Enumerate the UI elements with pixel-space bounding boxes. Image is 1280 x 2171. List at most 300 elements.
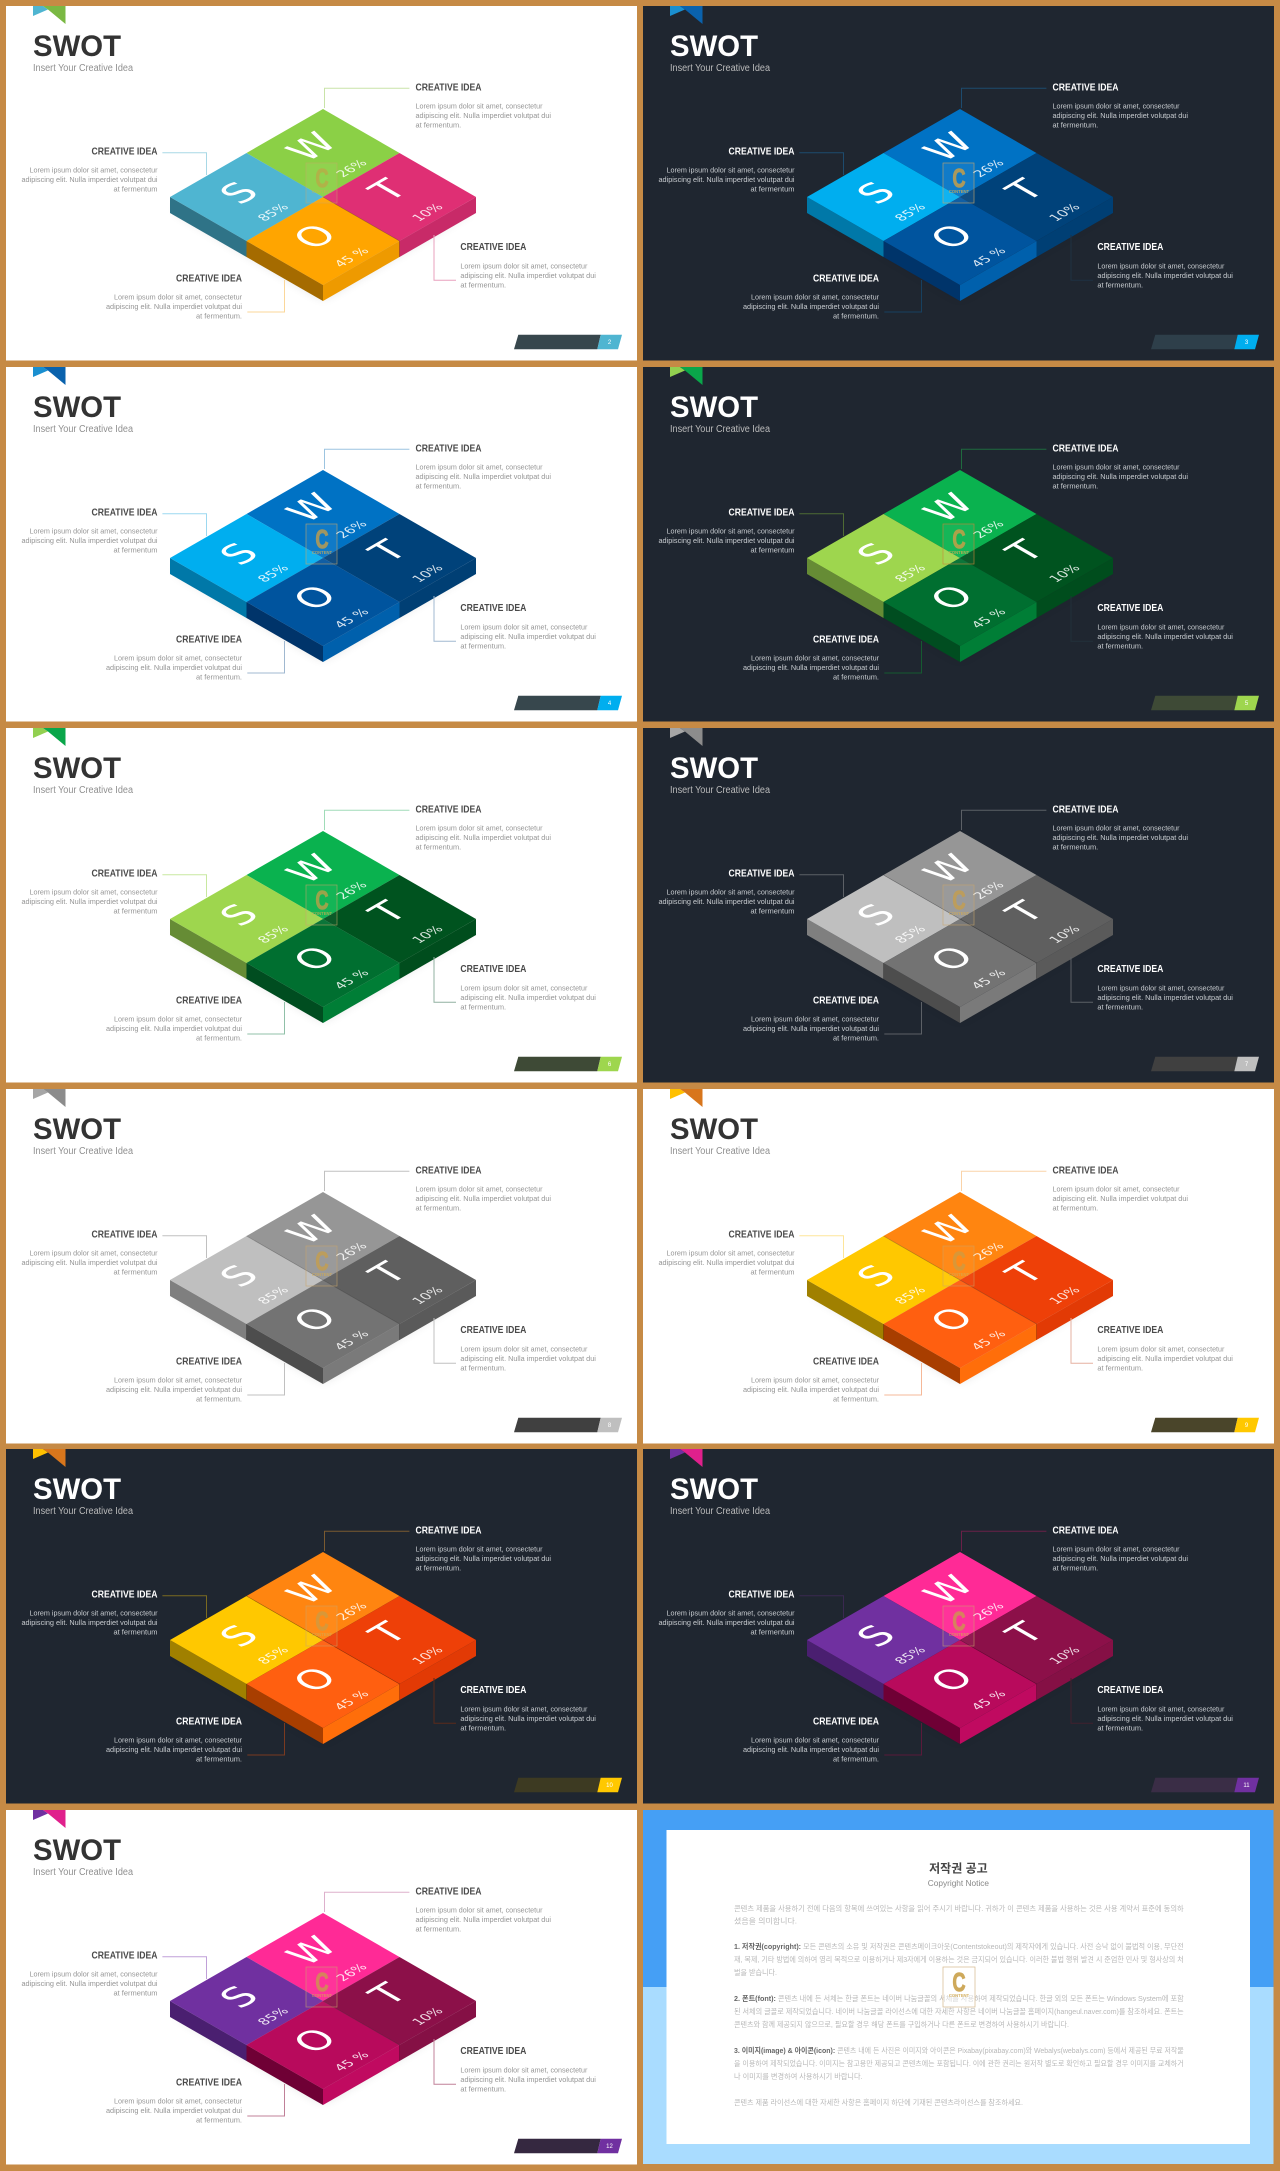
panel: slide 7 dark gray xyxy=(643,728,1274,1082)
callout: W xyxy=(324,804,551,852)
callout: T: Lorem ipsum dolor sit amet, consectetur xyxy=(460,1344,588,1353)
callout: T: at fermentum. xyxy=(1097,1002,1143,1011)
callout: T: CREATIVE IDEA xyxy=(1097,602,1164,614)
isometric SWOT diagram: T xyxy=(358,895,418,929)
callout: S: at fermentum xyxy=(750,1628,794,1637)
page number tab xyxy=(1151,1057,1259,1071)
title: SWOT xyxy=(33,1473,121,1506)
callout: S: CREATIVE IDEA xyxy=(92,1589,158,1601)
callout: O: adipiscing elit. Nulla imperdiet volutpat dui xyxy=(106,663,242,672)
callout: W: CREATIVE IDEA xyxy=(1052,1165,1119,1177)
callout: T: at fermentum. xyxy=(460,280,506,289)
isometric SWOT diagram: W xyxy=(276,126,347,167)
callout: O: at fermentum. xyxy=(833,1033,879,1042)
callout: O: CREATIVE IDEA xyxy=(813,633,879,645)
page number tab xyxy=(514,2139,622,2153)
isometric SWOT diagram xyxy=(170,1192,476,1384)
logo watermark: C xyxy=(952,163,966,193)
callout: O xyxy=(106,272,284,320)
ribbon icon xyxy=(670,1449,702,1467)
page number tab: 3 xyxy=(1245,340,1249,346)
page number tab: 5 xyxy=(1245,701,1249,707)
isometric SWOT diagram: S xyxy=(846,537,906,571)
callout: S: Lorem ipsum dolor sit amet, consectetur xyxy=(30,165,158,174)
subtitle: Insert Your Creative Idea xyxy=(33,63,133,74)
callout: O: Lorem ipsum dolor sit amet, consectetur xyxy=(114,1735,243,1744)
logo watermark: C xyxy=(316,1967,329,1997)
callout: W: adipiscing elit. Nulla imperdiet volutpat dui xyxy=(416,1915,551,1924)
logo watermark: CONTENT xyxy=(949,1632,970,1637)
callout: S: adipiscing elit. Nulla imperdiet volutpat dui xyxy=(658,1618,795,1627)
callout: O: CREATIVE IDEA xyxy=(176,633,242,645)
callout: T xyxy=(434,2039,596,2093)
callout: T: Lorem ipsum dolor sit amet, consectetur xyxy=(460,622,588,631)
callout: W: at fermentum. xyxy=(1052,482,1098,491)
callout: S: Lorem ipsum dolor sit amet, consectetur xyxy=(30,526,158,535)
title: SWOT xyxy=(33,1113,121,1146)
callout: O: CREATIVE IDEA xyxy=(813,1355,879,1367)
logo watermark xyxy=(943,1246,974,1286)
callout: S xyxy=(22,868,206,916)
callout: W: CREATIVE IDEA xyxy=(416,1525,482,1537)
callout: T: at fermentum. xyxy=(1097,1723,1143,1732)
logo watermark: CONTENT xyxy=(949,1993,970,1998)
callout: W: CREATIVE IDEA xyxy=(1052,804,1119,816)
callout: W xyxy=(324,1525,551,1573)
isometric SWOT diagram: T xyxy=(995,534,1055,568)
callout: T: Lorem ipsum dolor sit amet, consectetur xyxy=(1097,261,1225,270)
callout: O: adipiscing elit. Nulla imperdiet volutpat dui xyxy=(743,663,879,672)
isometric SWOT diagram: 26% xyxy=(970,880,1008,902)
callout: O: adipiscing elit. Nulla imperdiet volutpat dui xyxy=(743,1385,879,1394)
isometric SWOT diagram: T xyxy=(358,1256,418,1290)
isometric SWOT diagram: 10% xyxy=(409,924,447,946)
logo watermark: C xyxy=(952,885,966,915)
callout: O: at fermentum. xyxy=(196,1754,242,1763)
callout: W: Lorem ipsum dolor sit amet, consectetur xyxy=(1052,102,1180,111)
panel: slide 9 light orange xyxy=(643,1089,1274,1444)
callout: O: CREATIVE IDEA xyxy=(176,1355,242,1367)
callout: S: Lorem ipsum dolor sit amet, consectetur xyxy=(30,1608,158,1617)
callout: O: CREATIVE IDEA xyxy=(813,994,879,1006)
isometric SWOT diagram: S xyxy=(209,1259,269,1293)
isometric SWOT diagram: T xyxy=(358,173,418,207)
subtitle: Insert Your Creative Idea xyxy=(33,1506,133,1517)
logo watermark: C xyxy=(316,1246,329,1276)
callout: W: adipiscing elit. Nulla imperdiet volutpat dui xyxy=(416,833,551,842)
isometric SWOT diagram: T xyxy=(995,1616,1055,1650)
callout: W: at fermentum. xyxy=(416,1204,461,1213)
isometric SWOT diagram xyxy=(170,470,476,662)
isometric SWOT diagram: 10% xyxy=(1046,563,1084,585)
callout: S xyxy=(658,868,844,916)
callout: T xyxy=(434,1678,596,1732)
callout: O: Lorem ipsum dolor sit amet, consectetur xyxy=(751,1735,880,1744)
logo watermark xyxy=(306,1246,337,1286)
callout: O: Lorem ipsum dolor sit amet, consectetur xyxy=(751,1375,880,1384)
callout: T: adipiscing elit. Nulla imperdiet volutpat dui xyxy=(460,632,596,641)
title: SWOT xyxy=(33,752,121,785)
callout: W: adipiscing elit. Nulla imperdiet volutpat dui xyxy=(416,472,551,481)
callout: O: CREATIVE IDEA xyxy=(176,1715,242,1727)
notice subheading: Copyright Notice xyxy=(928,1878,989,1888)
callout: T: CREATIVE IDEA xyxy=(1097,963,1164,975)
notice body text: 재, 복제, 기타 방법에 의하여 영리 목적으로 이용하거나 제3자에게 이용하는 것은 금지되어 있습니다. 이러한 불법 행위 발견 시 준엄한 민사 및 형사상의 처 xyxy=(734,1954,1184,1964)
callout: W: Lorem ipsum dolor sit amet, consectetur xyxy=(416,1906,543,1915)
notice body text xyxy=(734,1903,1184,2107)
isometric SWOT diagram: W xyxy=(276,1930,347,1971)
callout: S: Lorem ipsum dolor sit amet, consectetur xyxy=(666,1248,795,1257)
callout: T: at fermentum. xyxy=(1097,641,1143,650)
callout: S: at fermentum xyxy=(750,907,794,916)
isometric SWOT diagram: 85% xyxy=(255,924,293,946)
callout: W: CREATIVE IDEA xyxy=(416,82,482,94)
title: SWOT xyxy=(33,30,121,63)
callout: O: CREATIVE IDEA xyxy=(813,272,879,284)
subtitle: Insert Your Creative Idea xyxy=(670,1506,770,1517)
subtitle: Insert Your Creative Idea xyxy=(33,785,133,796)
callout: S: adipiscing elit. Nulla imperdiet volutpat dui xyxy=(658,1258,795,1267)
title: SWOT xyxy=(33,1834,121,1867)
callout: O xyxy=(743,994,922,1042)
callout: S xyxy=(22,146,206,194)
callout: T xyxy=(1071,1678,1233,1732)
panel: slide 2 light teal green xyxy=(6,6,637,360)
logo watermark: C xyxy=(952,524,966,554)
logo watermark: CONTENT xyxy=(312,550,333,555)
callout: O: at fermentum. xyxy=(196,311,242,320)
isometric SWOT diagram: 10% xyxy=(409,1645,447,1667)
page number tab: 4 xyxy=(608,701,612,707)
logo watermark xyxy=(306,524,337,564)
callout: T: adipiscing elit. Nulla imperdiet volutpat dui xyxy=(460,1714,596,1723)
isometric SWOT diagram: S xyxy=(846,898,906,932)
callout: O: adipiscing elit. Nulla imperdiet volutpat dui xyxy=(106,302,242,311)
isometric SWOT diagram: 85% xyxy=(255,2006,293,2028)
logo watermark xyxy=(943,885,974,925)
callout: O: adipiscing elit. Nulla imperdiet volutpat dui xyxy=(106,2106,242,2115)
isometric SWOT diagram: 26% xyxy=(333,1601,371,1623)
callout: S: Lorem ipsum dolor sit amet, consectetur xyxy=(666,887,795,896)
logo watermark: C xyxy=(952,1246,966,1276)
callout: W: CREATIVE IDEA xyxy=(1052,443,1119,455)
callout: W: at fermentum. xyxy=(1052,1204,1098,1213)
callout: W: adipiscing elit. Nulla imperdiet volutpat dui xyxy=(1052,1194,1188,1203)
callout: O: Lorem ipsum dolor sit amet, consectetur xyxy=(114,292,243,301)
isometric SWOT diagram: 26% xyxy=(333,1241,371,1263)
isometric SWOT diagram: 10% xyxy=(1046,1285,1084,1307)
isometric SWOT diagram: 45 % xyxy=(968,968,1010,992)
isometric SWOT diagram: 10% xyxy=(1046,202,1084,224)
callout: O: at fermentum. xyxy=(833,672,879,681)
panel: slide 3 dark blue xyxy=(643,6,1274,360)
logo watermark: CONTENT xyxy=(312,1993,333,1998)
isometric SWOT diagram: O xyxy=(920,1301,984,1338)
isometric SWOT diagram: T xyxy=(995,895,1055,929)
callout: S: at fermentum xyxy=(114,907,158,916)
callout: T: adipiscing elit. Nulla imperdiet volutpat dui xyxy=(1097,1714,1233,1723)
callout: T xyxy=(434,235,596,289)
callout: O: Lorem ipsum dolor sit amet, consectetur xyxy=(114,1014,243,1023)
logo watermark: CONTENT xyxy=(312,1632,333,1637)
isometric SWOT diagram: W xyxy=(913,1209,984,1250)
callout: T: CREATIVE IDEA xyxy=(460,1324,527,1336)
isometric SWOT diagram: 85% xyxy=(255,1645,293,1667)
callout: T: Lorem ipsum dolor sit amet, consectetur xyxy=(460,983,588,992)
isometric SWOT diagram: O xyxy=(920,218,984,255)
callout: O: adipiscing elit. Nulla imperdiet volutpat dui xyxy=(743,1745,879,1754)
ribbon icon xyxy=(670,728,702,746)
logo watermark: C xyxy=(316,524,329,554)
logo watermark: C xyxy=(316,1606,329,1636)
isometric SWOT diagram: T xyxy=(995,1256,1055,1290)
callout: W: adipiscing elit. Nulla imperdiet volutpat dui xyxy=(416,1194,551,1203)
callout: O: Lorem ipsum dolor sit amet, consectetur xyxy=(751,1014,880,1023)
isometric SWOT diagram: 26% xyxy=(970,1241,1008,1263)
callout: W: at fermentum. xyxy=(1052,1564,1098,1573)
callout: S: Lorem ipsum dolor sit amet, consectetur xyxy=(30,887,158,896)
callout: S: at fermentum xyxy=(114,185,158,194)
notice body text: 3. 이미지(image) & 아이콘(icon): 콘텐츠 내에 든 사진은 이미지와 아이콘은 Pixabay(pixabay.com)와 Webalys(webalys.com) 등에서 제공된 무료 저작물 xyxy=(734,2045,1184,2055)
logo watermark xyxy=(306,1606,337,1646)
callout: O xyxy=(106,994,284,1042)
callout: W: CREATIVE IDEA xyxy=(416,1886,482,1898)
panel: slide 5 dark green xyxy=(643,367,1274,722)
callout: O xyxy=(743,1355,922,1403)
callout: W xyxy=(962,82,1188,130)
notice body text: 나 이미지를 변경하여 사용하시기 바랍니다. xyxy=(734,2071,863,2081)
callout: S xyxy=(22,507,206,555)
isometric SWOT diagram: 85% xyxy=(255,202,293,224)
logo watermark xyxy=(943,1967,975,2007)
callout: T: at fermentum. xyxy=(1097,280,1143,289)
callout: W: Lorem ipsum dolor sit amet, consectetur xyxy=(416,102,543,111)
callout: O xyxy=(106,2076,284,2124)
callout: T xyxy=(1071,596,1233,650)
subtitle: Insert Your Creative Idea xyxy=(33,1867,133,1878)
callout: T: Lorem ipsum dolor sit amet, consectetur xyxy=(460,2065,588,2074)
callout: S: CREATIVE IDEA xyxy=(728,146,795,158)
callout: T: CREATIVE IDEA xyxy=(460,963,527,975)
page number tab xyxy=(1151,1418,1259,1432)
isometric SWOT diagram: 10% xyxy=(1046,924,1084,946)
callout: W xyxy=(324,443,551,491)
callout: S xyxy=(658,146,844,194)
callout: T: adipiscing elit. Nulla imperdiet volutpat dui xyxy=(460,2075,596,2084)
logo watermark xyxy=(306,163,337,203)
isometric SWOT diagram: O xyxy=(283,579,347,616)
callout: T: at fermentum. xyxy=(460,1723,506,1732)
callout: S: at fermentum xyxy=(114,546,158,555)
logo watermark: C xyxy=(952,1967,966,1997)
callout: W: adipiscing elit. Nulla imperdiet volutpat dui xyxy=(1052,833,1188,842)
callout: W: at fermentum. xyxy=(1052,843,1098,852)
notice body text: 콘텐츠 제품을 사용하기 전에 다음의 항목에 쓰여있는 사항을 읽어 주시기 바랍니다. 귀하가 이 콘텐츠 제품을 사용하는 것은 사용 계약서 표준에 동의하 xyxy=(734,1903,1184,1913)
callout: W: adipiscing elit. Nulla imperdiet volutpat dui xyxy=(1052,472,1188,481)
isometric SWOT diagram: O xyxy=(920,579,984,616)
ribbon icon xyxy=(670,367,702,385)
title: SWOT xyxy=(670,752,758,785)
callout: W: at fermentum. xyxy=(416,121,461,130)
isometric SWOT diagram: W xyxy=(276,848,347,889)
notice body text: 을 이용하여 제작되었습니다. 이미지는 참고용만 제공되고 콘텐츠에는 포함됩니다. 이에 관한 권리는 원저작 별도로 확인하고 필요할 경우 이미지를 교체하거 xyxy=(734,2058,1184,2068)
callout: O: adipiscing elit. Nulla imperdiet volutpat dui xyxy=(106,1745,242,1754)
callout: S: Lorem ipsum dolor sit amet, consectetur xyxy=(30,1248,158,1257)
isometric SWOT diagram xyxy=(170,1552,476,1744)
ribbon icon xyxy=(33,6,66,24)
page number tab: 8 xyxy=(608,1423,612,1429)
isometric SWOT diagram: 26% xyxy=(333,519,371,541)
callout: S: CREATIVE IDEA xyxy=(92,1950,158,1962)
isometric SWOT diagram: 45 % xyxy=(968,246,1010,270)
callout: W xyxy=(324,1886,551,1934)
callout: T: CREATIVE IDEA xyxy=(1097,241,1164,253)
callout: O: Lorem ipsum dolor sit amet, consectetur xyxy=(751,292,880,301)
isometric SWOT diagram: W xyxy=(276,1569,347,1610)
callout: S xyxy=(22,1950,206,1998)
page number tab: 11 xyxy=(1243,1783,1250,1789)
isometric SWOT diagram: 45 % xyxy=(968,1329,1010,1353)
panel: slide 4 light blue xyxy=(6,367,637,722)
logo watermark: CONTENT xyxy=(949,550,970,555)
subtitle: Insert Your Creative Idea xyxy=(670,424,770,435)
callout: O xyxy=(743,1715,922,1763)
callout: T: CREATIVE IDEA xyxy=(1097,1684,1164,1696)
subtitle: Insert Your Creative Idea xyxy=(33,1146,133,1157)
callout: T: Lorem ipsum dolor sit amet, consectetur xyxy=(460,261,588,270)
callout: S: adipiscing elit. Nulla imperdiet volutpat dui xyxy=(658,897,795,906)
isometric SWOT diagram: 26% xyxy=(333,880,371,902)
page number tab xyxy=(1151,335,1259,349)
isometric SWOT diagram: S xyxy=(209,176,269,210)
callout: T xyxy=(434,957,596,1011)
callout: W: at fermentum. xyxy=(1052,121,1098,130)
callout: S: CREATIVE IDEA xyxy=(728,1229,795,1241)
title: SWOT xyxy=(670,1473,758,1506)
callout: O: at fermentum. xyxy=(833,1754,879,1763)
callout: S: at fermentum xyxy=(750,185,794,194)
callout: S: CREATIVE IDEA xyxy=(92,868,158,880)
logo watermark: CONTENT xyxy=(949,1272,970,1277)
logo watermark xyxy=(943,163,974,203)
callout: W: CREATIVE IDEA xyxy=(1052,1525,1119,1537)
isometric SWOT diagram: S xyxy=(209,1980,269,2014)
callout: W: Lorem ipsum dolor sit amet, consectetur xyxy=(1052,463,1180,472)
page number tab xyxy=(514,335,622,349)
callout: W xyxy=(962,443,1188,491)
callout: T xyxy=(1071,957,1233,1011)
logo watermark: CONTENT xyxy=(949,911,970,916)
page number tab xyxy=(514,1418,622,1432)
isometric SWOT diagram: 85% xyxy=(892,924,930,946)
logo watermark: CONTENT xyxy=(312,1272,333,1277)
callout: O: adipiscing elit. Nulla imperdiet volutpat dui xyxy=(743,1024,879,1033)
isometric SWOT diagram: 85% xyxy=(255,563,293,585)
callout: O: CREATIVE IDEA xyxy=(176,272,242,284)
page number tab: 6 xyxy=(608,1062,612,1068)
callout: S: adipiscing elit. Nulla imperdiet volutpat dui xyxy=(22,536,158,545)
ribbon icon xyxy=(33,728,66,746)
callout: S: at fermentum xyxy=(750,1268,794,1277)
ribbon icon xyxy=(670,6,702,24)
callout: T xyxy=(1071,235,1233,289)
callout: S: adipiscing elit. Nulla imperdiet volutpat dui xyxy=(658,175,795,184)
logo watermark: CONTENT xyxy=(312,189,333,194)
isometric SWOT diagram xyxy=(807,109,1113,301)
logo watermark: CONTENT xyxy=(949,189,970,194)
callout: S: CREATIVE IDEA xyxy=(92,1229,158,1241)
logo watermark: C xyxy=(316,885,329,915)
panel: slide 11 dark purple pink xyxy=(643,1449,1274,1804)
isometric SWOT diagram: 45 % xyxy=(968,607,1010,631)
callout: W xyxy=(324,82,551,130)
isometric SWOT diagram: O xyxy=(920,940,984,977)
callout: O: Lorem ipsum dolor sit amet, consectetur xyxy=(114,1375,243,1384)
isometric SWOT diagram: T xyxy=(358,1977,418,2011)
isometric SWOT diagram: 45 % xyxy=(331,1329,373,1353)
isometric SWOT diagram: W xyxy=(913,848,984,889)
callout: T: adipiscing elit. Nulla imperdiet volutpat dui xyxy=(460,271,596,280)
isometric SWOT diagram: S xyxy=(209,537,269,571)
notice body text: 1. 저작권(copyright): 모든 콘텐츠의 소유 및 저작권은 콘텐츠메이크아웃(Contentstokeout)의 제작자에게 있습니다. 사전 승낙 없이 불법적 이용, 무단전 xyxy=(734,1941,1184,1951)
page number tab xyxy=(514,1057,622,1071)
callout: O: at fermentum. xyxy=(833,311,879,320)
isometric SWOT diagram: W xyxy=(913,487,984,528)
callout: S xyxy=(658,1229,844,1277)
callout: W: Lorem ipsum dolor sit amet, consectetur xyxy=(416,463,543,472)
isometric SWOT diagram: 45 % xyxy=(331,607,373,631)
callout: W: at fermentum. xyxy=(416,1564,461,1573)
callout: S: at fermentum xyxy=(114,1989,158,1998)
isometric SWOT diagram: T xyxy=(358,534,418,568)
callout: O xyxy=(743,272,922,320)
subtitle: Insert Your Creative Idea xyxy=(670,785,770,796)
logo watermark xyxy=(306,1967,337,2007)
callout: T: CREATIVE IDEA xyxy=(460,241,527,253)
callout: T: Lorem ipsum dolor sit amet, consectetur xyxy=(1097,983,1225,992)
isometric SWOT diagram xyxy=(807,1552,1113,1744)
callout: T: Lorem ipsum dolor sit amet, consectetur xyxy=(1097,1344,1225,1353)
isometric SWOT diagram: 26% xyxy=(970,158,1008,180)
white notice card xyxy=(666,1830,1250,2144)
page number tab: 7 xyxy=(1245,1062,1249,1068)
ribbon icon xyxy=(33,1810,66,1828)
callout: S: CREATIVE IDEA xyxy=(728,507,795,519)
callout: O: CREATIVE IDEA xyxy=(813,1715,879,1727)
notice body text: 콘텐츠와 함께 제공되지 않으므로, 필요할 경우 해당 폰트를 구입하거나 다른 폰트로 변경하여 사용하시기 바랍니다. xyxy=(734,2019,1069,2029)
isometric SWOT diagram: W xyxy=(276,1209,347,1250)
callout: T xyxy=(434,1318,596,1372)
callout: S: adipiscing elit. Nulla imperdiet volutpat dui xyxy=(22,897,158,906)
callout: S: CREATIVE IDEA xyxy=(728,1589,795,1601)
title: SWOT xyxy=(670,1113,758,1146)
isometric SWOT diagram: 45 % xyxy=(968,1689,1010,1713)
callout: O: adipiscing elit. Nulla imperdiet volutpat dui xyxy=(743,302,879,311)
title: SWOT xyxy=(670,391,758,424)
isometric SWOT diagram: O xyxy=(283,1301,347,1338)
callout: S: Lorem ipsum dolor sit amet, consectetur xyxy=(666,165,795,174)
logo watermark xyxy=(943,524,974,564)
callout: W: CREATIVE IDEA xyxy=(1052,82,1119,94)
callout: T xyxy=(1071,1318,1233,1372)
isometric SWOT diagram: O xyxy=(283,2022,347,2059)
callout: T: at fermentum. xyxy=(460,1363,506,1372)
isometric SWOT diagram: S xyxy=(846,1259,906,1293)
callout: S: Lorem ipsum dolor sit amet, consectetur xyxy=(30,1969,158,1978)
callout: W: Lorem ipsum dolor sit amet, consectetur xyxy=(416,1545,543,1554)
callout: S xyxy=(22,1589,206,1637)
callout: T: adipiscing elit. Nulla imperdiet volutpat dui xyxy=(1097,993,1233,1002)
